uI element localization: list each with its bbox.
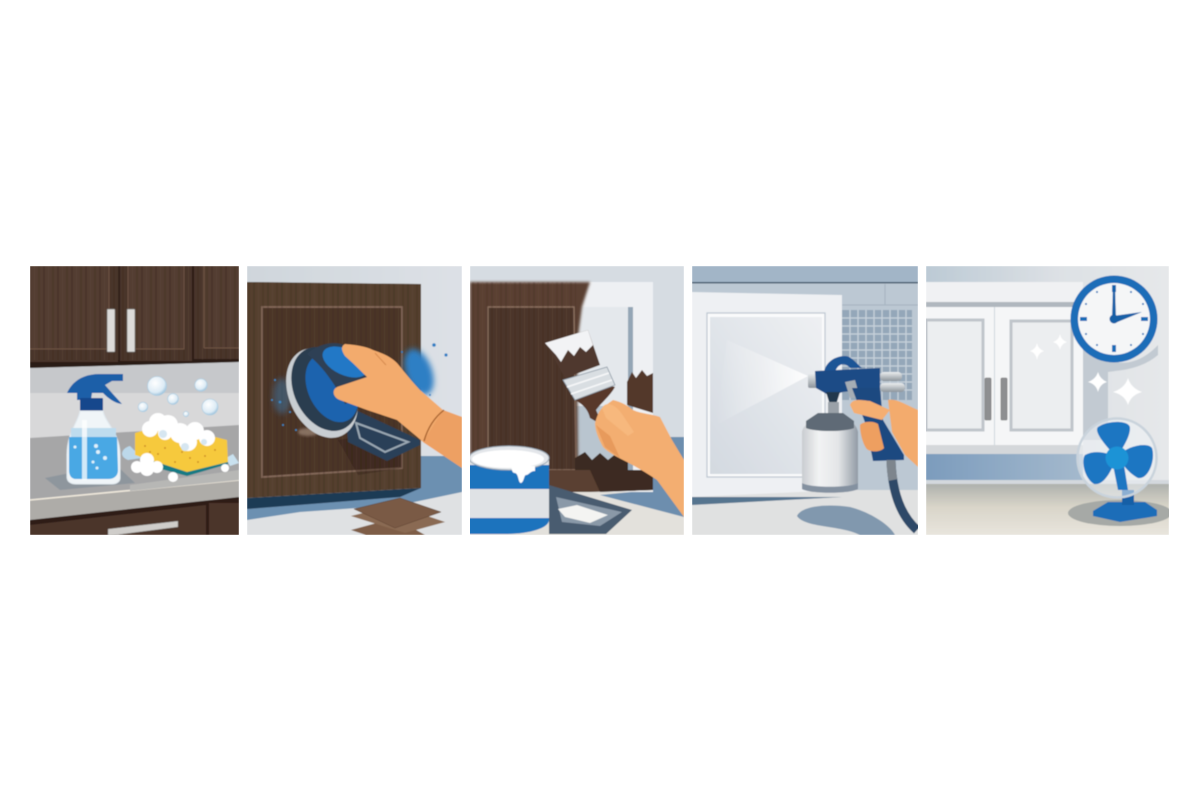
panel 2: sand the cabinets (247, 266, 462, 535)
icon: hand on sander (334, 344, 462, 468)
icon: paint brush (545, 330, 615, 425)
icon: soap bubbles (138, 376, 218, 417)
spray mist (746, 354, 808, 406)
countertop (30, 425, 239, 520)
panel 5: let the cabinets dry (926, 266, 1172, 535)
counter (470, 437, 684, 535)
icon: paint can (465, 446, 549, 534)
white cabinet door (692, 292, 842, 497)
icon: orbital sander (285, 342, 420, 462)
icon: wall clock (1070, 276, 1158, 362)
panel 4: spray the paint (692, 266, 918, 535)
upper brown cabinets (30, 266, 239, 368)
brown cabinet door (247, 282, 421, 498)
icon: air hose (891, 460, 917, 530)
counter and shadow (247, 456, 462, 535)
clock shadow (1082, 346, 1158, 440)
icon: paint cup (802, 413, 858, 493)
icon: table fan (1078, 418, 1157, 522)
icon: paint spray gun (808, 356, 905, 461)
panel 1: clean the cabinets (30, 266, 239, 536)
icon: spray bottle (67, 374, 123, 484)
cabinet handles (985, 378, 1007, 420)
icon: sandpaper sheets (351, 498, 445, 535)
icon: yellow sponge with foam (122, 413, 239, 482)
sanding dust (271, 343, 448, 436)
icon: paint tray (549, 485, 632, 534)
icon: hand holding spray gun (850, 400, 918, 467)
counter (692, 490, 918, 535)
under cabinet shadow and counter (926, 454, 1172, 535)
backsplash tile (842, 284, 918, 400)
cabinet handles (107, 309, 135, 352)
icon: hand holding brush (595, 400, 684, 517)
white upper cabinets (926, 282, 1083, 454)
half painted cabinet door (470, 282, 653, 492)
infographic: five cabinet painting steps (30, 266, 1169, 535)
panel 3: brush on primer (465, 266, 684, 535)
icon: sparkles (1030, 334, 1142, 405)
lower cabinets (30, 497, 239, 536)
